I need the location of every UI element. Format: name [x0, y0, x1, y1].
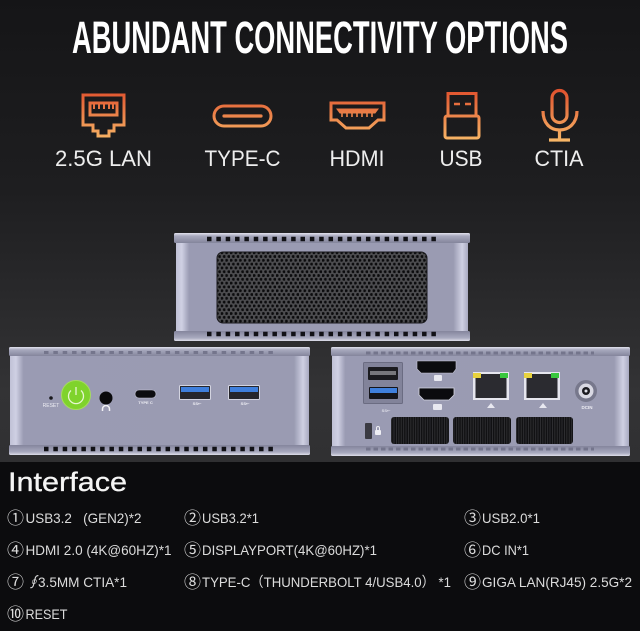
USB port 2 — [228, 386, 260, 406]
Type-C port: TYPE C — [138, 400, 153, 405]
row 3 — [7, 573, 632, 592]
vent slots — [44, 447, 275, 451]
row 1 — [7, 509, 540, 528]
label: TYPE-C: TYPE-C — [204, 146, 281, 171]
audio jack — [100, 392, 112, 411]
connectivity icon row — [55, 90, 584, 171]
row 1: USB3.2 (GEN2)*2 — [26, 510, 142, 526]
bottom vents — [391, 417, 573, 444]
HDMI port — [419, 388, 454, 410]
label: USB: USB — [440, 146, 482, 171]
vent slots — [207, 239, 438, 334]
vent slots — [366, 353, 594, 449]
row 1: ① — [7, 509, 24, 528]
icon: HDMI — [331, 103, 384, 128]
row 2: ④ — [7, 541, 24, 560]
row 2: ⑥ — [464, 541, 481, 560]
USB port 1 — [180, 386, 210, 406]
DisplayPort — [417, 361, 456, 381]
row 1: ② — [184, 509, 201, 528]
LAN port 2 — [524, 372, 560, 408]
label: CTIA: CTIA — [534, 146, 584, 171]
reset pinhole and label: RESET — [43, 403, 59, 409]
perforated grill — [217, 252, 427, 323]
reset pinhole and label — [43, 396, 59, 409]
row 1: ③ — [464, 509, 481, 528]
row 3: ⑧ — [184, 573, 201, 592]
row 3: ⑦ — [7, 573, 24, 592]
LAN port 1 — [473, 372, 509, 408]
Type-C port — [135, 390, 156, 405]
icon: microphone — [543, 90, 577, 140]
row 2: HDMI 2.0 (4K@60HZ)*1 — [26, 542, 172, 558]
icon: LAN — [83, 95, 124, 136]
row 3: ⑨ — [464, 573, 481, 592]
row 2: ⑤ — [184, 541, 201, 560]
row 3: GIGA LAN(RJ45) 2.5G*2 — [482, 574, 632, 590]
row 4 — [7, 605, 68, 624]
device: front view — [9, 347, 310, 455]
panel: interface list — [0, 462, 640, 631]
row 3: TYPE-C（THUNDERBOLT 4/USB4.0） *1 — [202, 574, 451, 590]
DC power jack — [575, 380, 597, 410]
icon: Type-C — [214, 106, 271, 126]
icon: USB — [445, 94, 479, 138]
heading: Interface: Interface — [8, 467, 127, 497]
lock slot — [365, 423, 381, 439]
row 2: DISPLAYPORT(4K@60HZ)*1 — [202, 542, 377, 558]
row 1: USB2.0*1 — [482, 510, 540, 526]
row 3: ∮ — [26, 574, 40, 590]
row 2: DC IN*1 — [482, 542, 529, 558]
row 4: RESET — [26, 606, 68, 622]
DC power jack: DCIN — [582, 405, 592, 410]
label: HDMI: HDMI — [330, 146, 384, 171]
device: top view — [174, 233, 470, 341]
label: 2.5G LAN: 2.5G LAN — [55, 146, 152, 171]
device: rear view — [331, 347, 630, 456]
row 4: ⑩ — [7, 605, 24, 624]
USB port 2: SS⇠ — [241, 401, 250, 406]
USB stack: SS⇠ — [382, 408, 391, 413]
row 3: 3.5MM CTIA*1 — [38, 574, 127, 590]
USB port 1: SS⇠ — [193, 401, 202, 406]
USB stack — [364, 362, 402, 413]
power button — [62, 380, 90, 410]
row 1: USB3.2*1 — [202, 510, 259, 526]
row 2 — [7, 541, 529, 560]
